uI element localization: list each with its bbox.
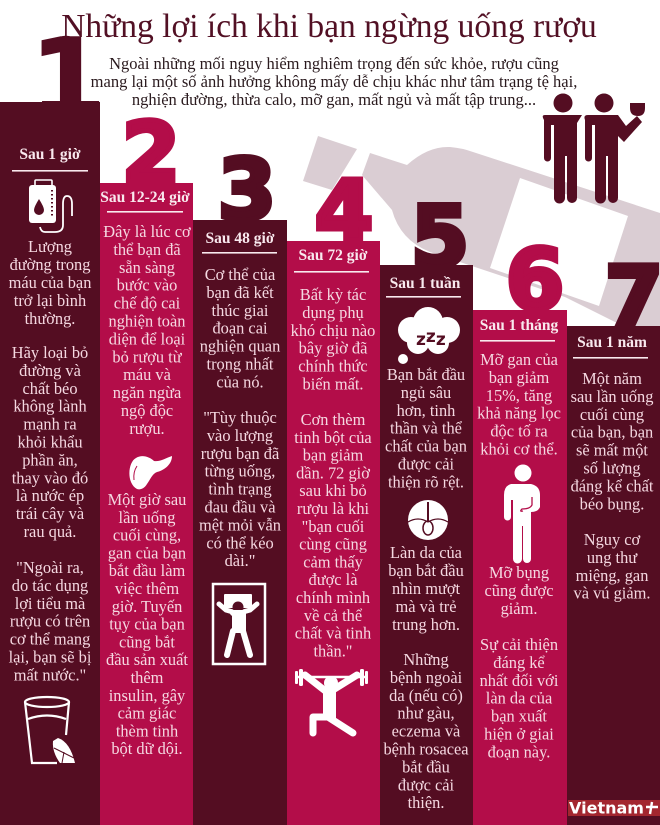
panel: Sau 48 giờ: dài." [225,551,255,570]
panel: Sau 1 tuần: thiện. [408,793,444,812]
panel: Sau 1 giờ: trở lại bình [14,291,86,310]
panel: Sau 72 giờ: khó chịu nào [291,321,375,340]
panel: Sau 72 giờ: chính thức [298,357,368,376]
icon: skin follicle [408,500,448,540]
panel: Sau 72 giờ: cùng cũng [299,535,367,554]
panel: Sau 12-24 giờ: Một giờ sau [108,490,186,509]
panel: Sau 72 giờ: cảm thấy [303,552,364,571]
panel: Sau 1 tuần: bạn bắt đầu [388,561,464,580]
panel: Sau 1 năm: số lượng [583,458,641,478]
panel: Sau 48 giờ: đau đầu và [204,498,276,516]
panel: Sau 48 giờ: mệt mỏi vẫn [199,515,281,534]
panel: Sau 1 tuần: hơn, tinh [397,401,455,420]
panel: Sau 72 giờ: dụng phụ [302,303,364,322]
panel: Sau 1 tuần: được cải [398,775,455,794]
panel: Sau 1 giờ: thay vào đó [12,468,88,487]
panel: Sau 1 tuần: ngủ sâu [401,383,451,402]
panel: Sau 1 giờ: đường trong [10,255,90,274]
icon: blood glucose bag [29,180,72,232]
panel: Sau 72 giờ: chính mình [296,588,370,607]
icon: weightlifter [295,669,368,733]
panel: Sau 1 giờ: mạnh ra [23,415,77,434]
panel: Sau 1 giờ [0,102,100,825]
panel: Sau 72 giờ: biến mất. [302,374,364,394]
panel: Sau 1 tuần: Bạn bắt đầu [387,365,465,384]
panel: Sau 1 giờ: rượu có trên [10,612,90,631]
panel: Sau 48 giờ: trọng nhất [207,354,274,374]
panel: Sau 1 tháng: Sự cải thiện [480,635,558,654]
big numbers: 5 [411,188,469,286]
panel: Sau 12-24 giờ: Đây là lúc cơ [103,222,191,241]
icon: sleep cloud: z [416,330,426,350]
panel: Sau 72 giờ: về cả thể [304,606,363,625]
panel: Sau 12-24 giờ: giờ. Tuyến [112,597,182,616]
icon: person in bed [213,584,265,664]
panel: Sau 1 giờ: lợi tiểu mà [15,594,86,613]
panel: Sau 1 giờ: là nước ép [16,486,84,505]
panel: Sau 12-24 giờ: insulin, gây [109,686,186,705]
panel: Sau 1 giờ: máu của bạn [9,273,91,292]
panel: Sau 1 tháng: đoạn này. [488,742,550,761]
panel: Sau 48 giờ: "Tùy thuộc [203,408,277,427]
panel: Sau 72 giờ: thần." [313,641,353,660]
panel: Sau 1 tuần: da (nếu có) [389,686,463,705]
panel: Sau 1 năm: ung thư [587,548,638,567]
panel: Sau 1 giờ: Hãy loại bỏ [12,343,88,362]
panel: Sau 1 tuần: được cải [398,454,455,474]
panel: Sau 12-24 giờ: Sau 12-24 giờ [100,189,190,206]
logo: Vietnam+: Vietnam [569,798,644,818]
panel: Sau 1 tháng: 15%, tăng [486,386,552,405]
panel: Sau 1 giờ: khỏi khẩu [17,432,83,452]
panel: Sau 12-24 giờ: diện để loại [109,329,186,348]
icon: sleep cloud [398,307,460,364]
panel: Sau 12-24 giờ: nghiện toàn [109,312,185,330]
title: Những lợi ích khi bạn ngừng uống rượu [61,8,597,45]
panel: Sau 1 giờ: do tác dụng [12,576,88,595]
panel: Sau 48 giờ: Sau 48 giờ [206,230,275,247]
panel: Sau 1 tuần: mà và trẻ [396,597,456,616]
panel: Sau 1 tuần: thần và thể [390,419,463,438]
panel: Sau 1 tháng: nhất đối với [480,671,559,690]
background wine bottle [303,136,660,335]
panel: Sau 12-24 giờ: thể bạn đã [113,240,181,259]
panel: Sau 1 tuần [380,265,473,825]
panel: Sau 1 tháng: khả năng lọc [477,404,561,423]
panel: Sau 12-24 giờ: cũng bắt [119,632,175,651]
panel: Sau 1 tuần: như gàu, [397,704,455,723]
panel: Sau 1 giờ: cơ thể mang [10,630,90,649]
panel: Sau 1 tháng: cũng được [485,581,553,600]
panel: Sau 48 giờ: từng uống, [205,462,275,481]
panel: Sau 1 giờ: rau quả. [24,522,76,541]
panel: Sau 1 giờ: "Ngoài ra, [16,558,84,577]
panel: Sau 12-24 giờ: bắt đầu làm [109,561,185,580]
icon: sleep cloud: z [426,327,436,347]
panel: Sau 12-24 giờ: ngộ độc [121,401,173,420]
panel: Sau 48 giờ: tình trạng [208,480,272,499]
panel: Sau 48 giờ: vào lượng [207,426,273,445]
panel: Sau 12-24 giờ: thèm tinh [116,721,178,740]
big numbers: 4 [315,162,373,260]
panel: Sau 12-24 giờ: đầu sản xuất [106,650,188,669]
panel: Sau 48 giờ: bạn đã kết [206,283,274,302]
panel: Sau 72 giờ: "bạn cuối [302,517,365,536]
panel: Sau 1 giờ: Lượng [28,237,72,256]
panel: Sau 1 giờ: không lành [13,397,87,416]
panel: Sau 48 giờ [193,220,287,825]
panel: Sau 12-24 giờ: lần uống [119,508,175,527]
panel: Sau 1 tuần: chất của bạn [385,437,467,456]
panel: Sau 1 năm: Nguy cơ [584,530,641,549]
panel: Sau 72 giờ: chất và tinh [295,624,371,643]
panel: Sau 72 giờ: Bất kỳ tác [300,285,366,304]
panel: Sau 12-24 giờ: bước vào [117,276,177,295]
panel: Sau 12-24 giờ: rượu. [129,419,165,438]
panel: Sau 72 giờ: Sau 72 giờ [299,247,368,264]
panel: Sau 48 giờ: nghiện quan [200,337,280,356]
panel: Sau 12-24 giờ: cảm giác [118,704,176,723]
panel: Sau 72 giờ: bạn giảm [303,446,364,465]
panel: Sau 1 tháng: làn da của [486,689,553,708]
panel: Sau 1 năm: đáng kể chất [571,476,654,495]
panel: Sau 1 năm: sẽ mất một [576,441,648,460]
panel: Sau 1 năm: béo bụng. [580,494,644,513]
panel: Sau 48 giờ: rượu bạn đã [201,444,280,463]
panel: Sau 72 giờ: được là [309,570,358,589]
panel: Sau 1 giờ: chất béo [22,379,78,398]
panel: Sau 1 tuần: nhìn mượt [392,579,460,598]
panel: Sau 1 giờ: trái cây và [16,504,85,523]
panel: Sau 72 giờ: bây giờ đã [299,339,368,358]
icon: liver [129,456,172,489]
panel: Sau 1 năm: Một năm [582,369,642,388]
panel: Sau 1 giờ: lại, bạn sẽ bị [9,648,92,666]
panel: Sau 12-24 giờ: sẵn sàng [119,258,175,277]
icon: sleep cloud: z [436,330,446,350]
panel: Sau 1 tháng: giảm. [501,599,537,618]
panel: Sau 72 giờ [287,241,380,825]
big numbers: 2 [122,104,180,202]
panel: Sau 12-24 giờ: gan của bạn [108,543,186,562]
panel: Sau 1 tháng: bạn xuất [491,707,547,726]
panel: Sau 1 giờ: đường và [19,361,82,380]
big numbers: 6 [506,231,564,329]
panel: Sau 1 giờ: mất nước." [14,665,86,684]
panel: Sau 1 năm: Sau 1 năm [577,334,647,351]
panel: Sau 1 năm: cuối cùng [580,405,644,424]
panel: Sau 72 giờ: Cơn thèm [301,410,366,429]
big numbers: 1 [30,17,106,142]
panel: Sau 12-24 giờ: chế độ cai [114,294,181,313]
panel: Sau 1 tuần: eczema và [392,722,461,741]
intro text: nghiện đường, thừa calo, mỡ gan, mất ngủ và mất tập trung... [132,90,536,109]
big numbers: 3 [218,141,276,239]
panel: Sau 1 năm: miệng, gan [576,566,648,585]
panel: Sau 1 năm: của bạn, bạn [571,423,653,442]
panel: Sau 72 giờ: tinh bột của [294,428,372,447]
panel: Sau 12-24 giờ: ngăn ngừa [113,383,182,402]
panel: Sau 1 năm: và vú giảm. [574,584,650,603]
panel: Sau 1 tháng: hiện ở giai [484,724,554,744]
panel: Sau 1 tháng [473,310,567,825]
panel: Sau 12-24 giờ: bỏ rượu từ [112,347,183,366]
panel: Sau 12-24 giờ: tụy của bạn [109,615,185,634]
intro text: mang lại một số ảnh hưởng không mấy dễ chịu khác như tâm trạng tệ hại, [91,72,577,91]
panel: Sau 1 tuần: Sau 1 tuần [390,275,461,292]
panel: Sau 1 tháng: Mỡ bụng [489,563,549,582]
icon: two people drinking [543,94,645,204]
panel: Sau 72 giờ: sau khi bỏ [299,481,367,500]
panel: Sau 72 giờ: rượu là khi [297,499,370,518]
panel: Sau 48 giờ: thúc giai [212,301,269,320]
panel: Sau 12-24 giờ [100,183,193,825]
panel: Sau 1 tháng: Sau 1 tháng [480,317,558,334]
panel: Sau 1 tuần: bệnh rosacea [383,740,469,758]
panel: Sau 1 tuần: thiện rõ rệt. [388,472,464,491]
panel: Sau 48 giờ: đoạn cai [212,319,268,338]
panel: Sau 48 giờ: Cơ thể của [205,265,276,284]
panel: Sau 1 tuần: bệnh ngoài [390,668,463,687]
panel: Sau 1 tuần: bắt đầu [402,757,450,776]
panel: Sau 12-24 giờ: cuối cùng, [113,526,181,545]
panel: Sau 12-24 giờ: thêm [131,668,164,687]
panel: Sau 1 tháng: độc tố ra [490,422,548,441]
panel: Sau 48 giờ: có thể kéo [206,533,274,552]
panel: Sau 1 tháng: khỏi cơ thể. [480,440,558,458]
panel: Sau 1 giờ: phần ăn, [22,450,78,469]
panel: Sau 12-24 giờ: máu và [123,365,172,384]
panel: Sau 12-24 giờ: bột dữ dội. [111,739,183,758]
panel: Sau 1 năm [567,326,660,825]
panel: Sau 1 tuần: Làn da của [390,543,463,562]
intro text: Ngoài những mối nguy hiểm nghiêm trọng đến sức khỏe, rượu cũng [109,54,559,73]
panel: Sau 1 giờ: Sau 1 giờ [19,146,81,163]
panel: Sau 1 giờ: thường. [25,309,75,328]
panel: Sau 72 giờ: dần. 72 giờ [296,463,370,482]
panel: Sau 1 tháng: bạn giảm [489,368,550,387]
panel: Sau 12-24 giờ: việc thêm [115,579,179,598]
panel: Sau 1 tháng: đáng kể [493,653,545,672]
big numbers [30,17,660,346]
panel: Sau 48 giờ: của nó. [216,372,264,391]
icon: person with belly [504,464,540,564]
panel: Sau 1 tháng: Mỡ gan của [480,350,559,369]
panel: Sau 1 năm: sau lần uống [571,387,653,406]
panel: Sau 1 tuần: trung hơn. [392,615,460,634]
panel: Sau 1 tuần: Những [403,650,449,669]
icon: glass of juice [25,697,75,763]
